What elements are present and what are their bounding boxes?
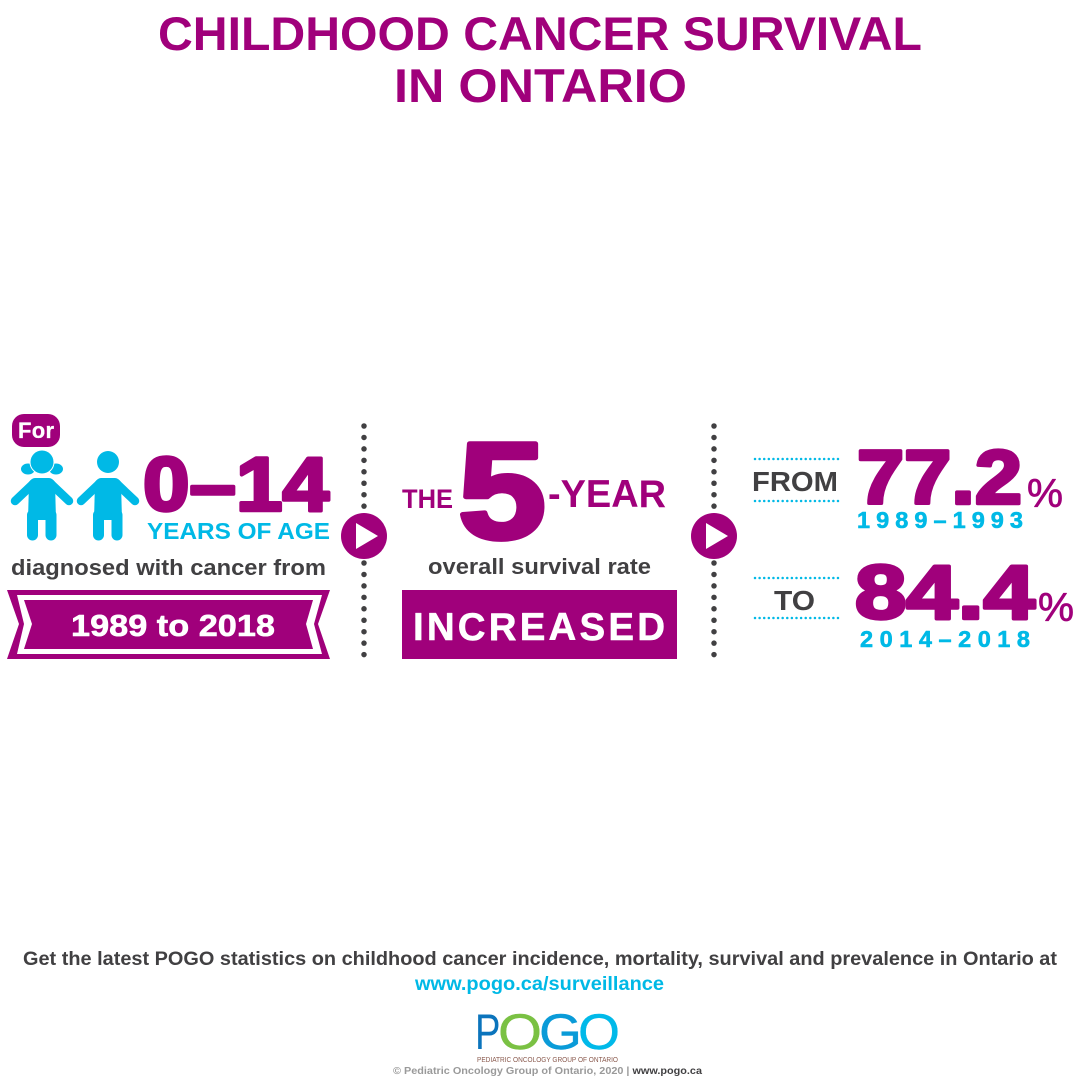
logo: POGO: P: [475, 1004, 500, 1060]
footer text: www.pogo.ca/surveillance: [414, 974, 664, 995]
ribbon: 1989 to 2018: [7, 590, 330, 659]
big 5: 5: [458, 415, 546, 568]
period 1989-1993: 1989–1993: [857, 507, 1023, 533]
percent sign: %: [1038, 586, 1074, 630]
age range: 0–14: [143, 442, 329, 528]
logo: POGO: G: [539, 1004, 582, 1060]
title: [158, 7, 922, 112]
title: CHILDHOOD CANCER SURVIVAL: [158, 7, 922, 60]
survival rate text: overall survival rate: [428, 554, 651, 579]
icon: boy: [81, 451, 135, 535]
period 2014-2018: 2014–2018: [860, 626, 1030, 652]
to label: TO: [774, 585, 815, 616]
title: IN ONTARIO: [394, 59, 687, 112]
from label: FROM: [752, 466, 838, 497]
logo: POGO: PEDIATRIC ONCOLOGY GROUP OF ONTARIO: [477, 1055, 618, 1064]
panel: who: [7, 414, 330, 659]
footer text: [23, 949, 1058, 995]
divider with arrow: left: [341, 426, 387, 657]
diagnosed text: diagnosed with cancer from: [11, 555, 326, 580]
increased box: [402, 590, 677, 659]
increased box: INCREASED: [413, 606, 665, 649]
the: THE: [402, 484, 453, 514]
value 77.2: 77.2: [857, 436, 1022, 520]
year: -YEAR: [548, 473, 666, 516]
years of age: YEARS OF AGE: [147, 518, 330, 544]
panel: to: [755, 550, 1074, 652]
logo: POGO: O: [498, 1004, 542, 1060]
label: For: [12, 414, 60, 447]
ribbon: 1989 to 2018: 1989 to 2018: [71, 608, 275, 643]
divider with arrow: right: [691, 426, 737, 657]
value 84.4: 84.4: [855, 550, 1035, 636]
logo: POGO: O: [578, 1004, 620, 1060]
footer text: Get the latest POGO statistics on childhood cancer incidence, mortality, survival and prevalence in Ontario at: [23, 949, 1058, 970]
panel: from: [752, 436, 1063, 533]
panel: five-year rate: [402, 415, 677, 659]
logo: POGO: [475, 1004, 620, 1064]
icon: girl: [15, 450, 69, 535]
copyright: © Pediatric Oncology Group of Ontario, 2020 | www.pogo.ca: [393, 1065, 702, 1077]
percent sign: %: [1027, 472, 1063, 516]
label: For: For: [18, 418, 54, 443]
